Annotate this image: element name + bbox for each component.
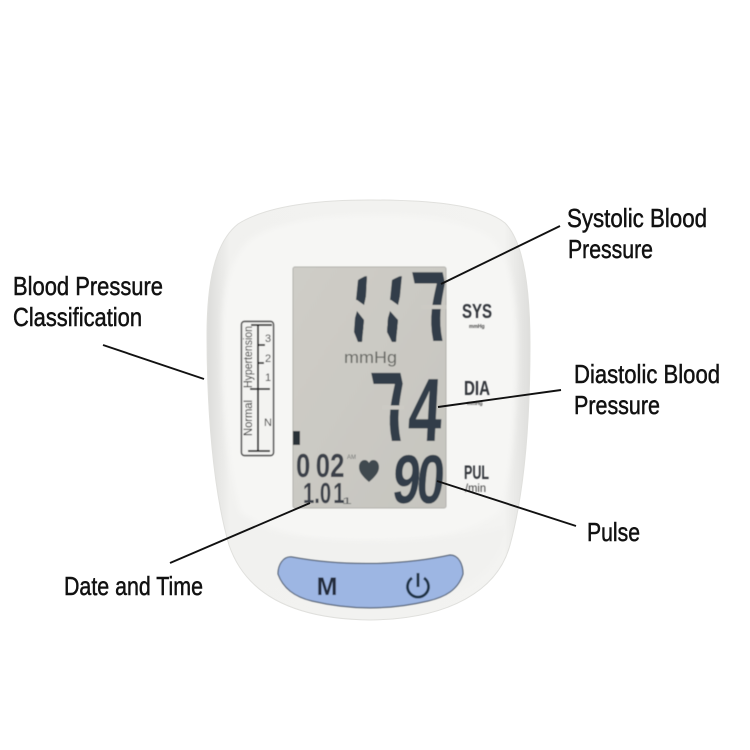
battery marker <box>293 431 300 445</box>
callout: blood pressure classification: Blood Pressure <box>13 271 163 301</box>
side label: DIA: mmHg <box>467 401 483 407</box>
scale numbers <box>264 333 272 429</box>
side label: SYS: mmHg <box>469 324 485 330</box>
device body <box>207 200 530 620</box>
callout: date and time: Date and Time <box>64 571 203 601</box>
callout: blood pressure classification <box>13 271 163 332</box>
systolic reading <box>354 272 446 342</box>
side label: SYS <box>462 301 492 330</box>
button: M: M <box>317 573 337 601</box>
scale numbers: 2 <box>265 353 271 365</box>
callout: systolic blood pressure: Systolic Blood <box>567 203 707 233</box>
pointer: systolic <box>441 226 560 284</box>
diastolic reading: 7 <box>364 351 422 462</box>
control button bar <box>278 555 463 608</box>
unit mmHg: mmHg <box>344 348 397 367</box>
memory marker: 1 <box>342 496 352 506</box>
label: Hypertension: Hypertension <box>243 326 255 388</box>
systolic reading: 1 <box>331 258 384 361</box>
scale numbers: N <box>264 417 272 429</box>
pointer: pulse <box>437 481 576 526</box>
label: Normal: Normal <box>241 400 255 436</box>
pointer lines <box>103 226 576 563</box>
icon: power <box>408 573 428 597</box>
pulse reading <box>390 440 448 518</box>
heart icon <box>359 460 379 482</box>
pointer: date and time <box>170 503 310 563</box>
side label: PUL: PUL <box>464 463 489 484</box>
date reading: 1.01 <box>303 478 345 510</box>
callout: diastolic blood pressure: Diastolic Blood <box>574 359 720 389</box>
diastolic reading: 4 <box>406 361 445 461</box>
pulse reading: 0 <box>414 440 448 518</box>
pulse reading: 9 <box>390 440 424 518</box>
callout: systolic blood pressure <box>567 203 707 264</box>
scale numbers: 1 <box>265 372 271 384</box>
classification scale <box>241 322 274 456</box>
LCD screen <box>292 266 447 509</box>
clock reading: 002 <box>296 448 344 485</box>
side label: DIA: DIA <box>464 378 490 400</box>
side label: SYS: SYS <box>462 301 492 323</box>
callout: systolic blood pressure: Pressure <box>568 234 653 264</box>
systolic reading: 1 <box>365 258 418 361</box>
side label: DIA <box>464 378 490 407</box>
callout: diastolic blood pressure <box>574 359 720 420</box>
side label: PUL <box>464 463 489 495</box>
pointer: diastolic <box>438 390 561 407</box>
scale numbers: 3 <box>265 333 271 345</box>
AM marker: AM <box>347 455 356 461</box>
systolic reading: 7 <box>405 251 465 363</box>
callout: pulse: Pulse <box>587 517 640 547</box>
callout: blood pressure classification: Classification <box>13 302 142 332</box>
side label: PUL: /min <box>465 481 486 495</box>
pointer: classification <box>103 345 204 379</box>
callout: diastolic blood pressure: Pressure <box>574 390 660 420</box>
